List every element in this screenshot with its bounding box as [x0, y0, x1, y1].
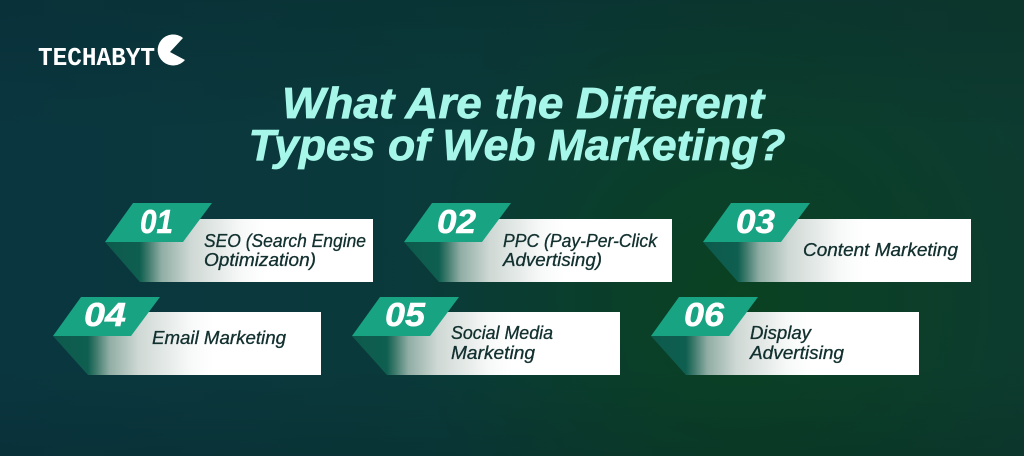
- card 04 number: 04: [84, 296, 126, 333]
- card 05 body: [352, 312, 620, 375]
- card 01: [105, 203, 373, 282]
- card 06 label: Advertising: [749, 343, 844, 363]
- card 02 body: [404, 219, 672, 282]
- card 02 label: Advertising): [502, 250, 602, 270]
- title: What Are the Different: [282, 80, 766, 128]
- card 01 body: [105, 219, 373, 282]
- logo wordmark: TECHABYT: [38, 43, 155, 73]
- card 04 label: Email Marketing: [152, 328, 286, 348]
- card 03: [703, 203, 971, 282]
- card 03 label: Content Marketing: [803, 240, 958, 260]
- card 06 body: [651, 312, 919, 375]
- card 01 number: 01: [140, 203, 173, 240]
- logo icon: pac-man E: [158, 34, 185, 65]
- card 06: [651, 296, 919, 375]
- card 04 body: [53, 312, 321, 375]
- card 04 number tab: [53, 297, 160, 336]
- card 06 label: Display: [750, 323, 812, 343]
- card 05: [352, 296, 620, 375]
- card 05 number tab: [352, 297, 459, 336]
- card 03 number: 03: [736, 203, 775, 240]
- logo: Techabyte: [38, 34, 185, 73]
- card 02 number: 02: [437, 203, 477, 240]
- card 04: [53, 296, 321, 375]
- card 01 label: Optimization): [204, 250, 316, 270]
- card 05 label: Social Media: [451, 323, 553, 343]
- card 02 label: PPC (Pay-Per-Click: [503, 231, 658, 251]
- title: [248, 80, 786, 170]
- card 05 number: 05: [385, 296, 426, 333]
- title: Types of Web Marketing?: [248, 122, 786, 170]
- card 02 number tab: [404, 203, 511, 242]
- card 05 label: Marketing: [451, 343, 535, 363]
- card 06 number: 06: [684, 296, 725, 333]
- card 03 body: [703, 219, 971, 282]
- card 01 label: SEO (Search Engine: [204, 231, 366, 251]
- card 06 number tab: [651, 297, 758, 336]
- card 03 number tab: [703, 203, 810, 242]
- card 01 number tab: [105, 203, 212, 242]
- card 02: [404, 203, 672, 282]
